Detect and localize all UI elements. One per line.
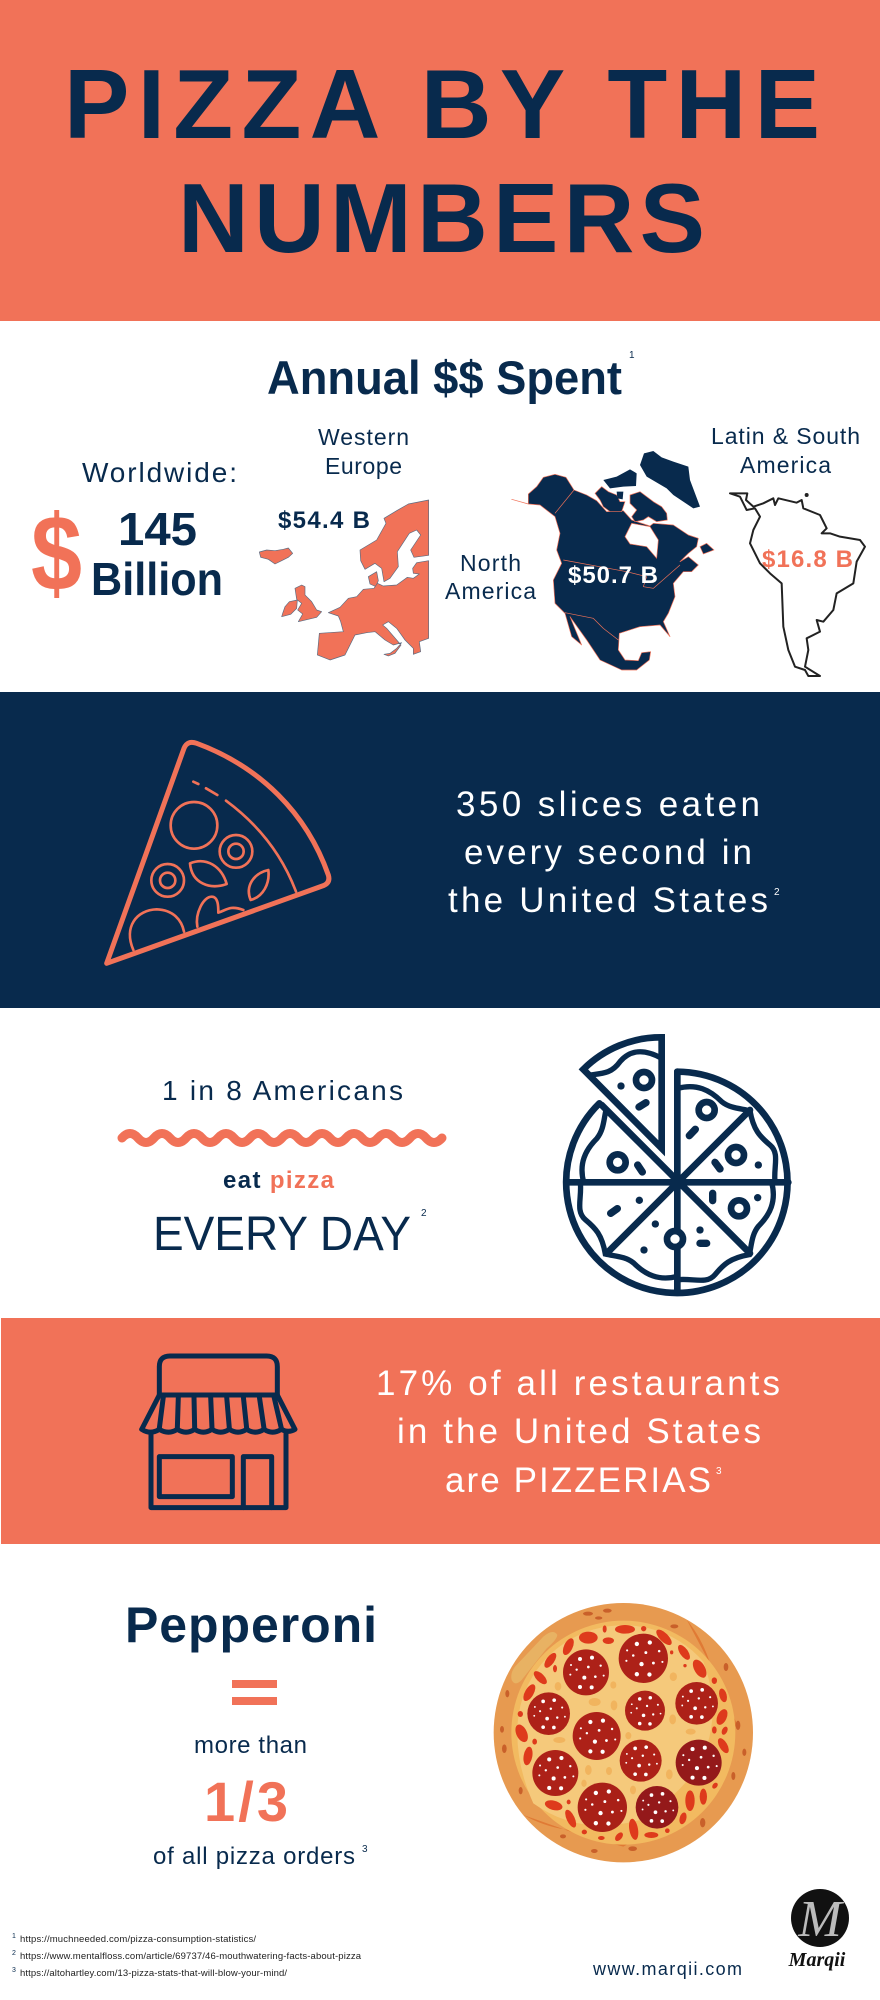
icon: dollar sign: $ — [31, 492, 82, 613]
logo: marqii: Marqii — [788, 1949, 846, 1971]
text: every day: EVERY DAY — [153, 1208, 411, 1261]
title: NUMBERS — [178, 163, 705, 273]
icon: sliced pizza — [566, 1037, 788, 1293]
region label: north america: North — [460, 550, 521, 576]
logo: marqii: M — [797, 1891, 844, 1948]
footnotes: 2 — [12, 1950, 16, 1957]
heading: annual spent: 1 — [629, 350, 635, 361]
logo: marqii — [788, 1889, 849, 1971]
icon: pizza slice — [107, 742, 329, 963]
footnotes: https://www.mentalfloss.com/article/69737/46-mouthwatering-facts-about-pizza — [20, 1951, 362, 1962]
region label: north america — [445, 550, 536, 604]
heading: annual spent: Annual $$ Spent — [267, 351, 622, 404]
text: pizzerias fact — [376, 1364, 780, 1500]
map: north america — [512, 451, 714, 670]
region label: western europe: Western — [318, 424, 409, 450]
text: pizzerias fact: are PIZZERIAS — [445, 1461, 711, 1500]
text: pizzerias fact: in the United States — [397, 1412, 761, 1451]
text: slices fact — [448, 785, 780, 920]
worldwide amount — [91, 503, 223, 605]
panel: footer — [12, 1889, 849, 1979]
text: pizzerias fact: 17% of all restaurants — [376, 1364, 780, 1403]
footnotes: https://altohartley.com/13-pizza-stats-that-will-blow-your-mind/ — [20, 1968, 287, 1979]
worldwide amount: Billion — [91, 553, 223, 605]
text: every day: 2 — [421, 1208, 427, 1219]
map: south america — [730, 493, 865, 676]
panel: title banner — [0, 0, 880, 321]
panel: one in eight — [122, 1037, 788, 1293]
footnotes — [12, 1933, 362, 1979]
text: one third: 1/3 — [204, 1770, 288, 1833]
map: western europe — [259, 500, 429, 660]
value: latin and south america: $16.8 B — [762, 546, 853, 573]
title: PIZZA BY THE — [64, 49, 820, 159]
region label: north america: America — [445, 578, 536, 604]
text: pepperoni: Pepperoni — [125, 1597, 377, 1653]
region label: western europe: Europe — [325, 453, 402, 479]
panel: annual spend — [31, 350, 865, 676]
illustration: pepperoni pizza — [494, 1603, 753, 1862]
text: 1 in 8 americans: 1 in 8 Americans — [162, 1075, 403, 1106]
text: eat pizza: eat pizza — [223, 1167, 335, 1194]
footnotes: 3 — [12, 1967, 16, 1974]
region label: western europe — [318, 424, 409, 479]
footnotes: 1 — [12, 1933, 16, 1940]
text: pizzerias fact: 3 — [716, 1466, 722, 1477]
footnotes: https://muchneeded.com/pizza-consumption-statistics/ — [20, 1934, 256, 1945]
text: of all pizza orders: of all pizza orders — [153, 1843, 355, 1870]
panel: slices per second — [0, 692, 880, 1008]
value: north america: $50.7 B — [568, 562, 658, 589]
title — [64, 49, 820, 273]
text: slices fact: 2 — [774, 887, 780, 898]
icon: equals sign — [232, 1680, 277, 1705]
icon: storefront — [142, 1356, 295, 1508]
region label: latin and south america — [711, 423, 860, 478]
panel: pepperoni — [125, 1597, 753, 1870]
decorative wave — [122, 1134, 442, 1142]
region label: latin and south america: Latin & South — [711, 423, 860, 449]
text: slices fact: the United States — [448, 881, 768, 920]
worldwide amount: 145 — [118, 503, 197, 555]
text: of all pizza orders: 3 — [362, 1844, 368, 1855]
text: more than: more than — [194, 1732, 307, 1759]
website link: www.marqii.com — [592, 1959, 742, 1979]
worldwide label: Worldwide: — [82, 457, 237, 488]
value: western europe: $54.4 B — [278, 507, 370, 534]
panel: pizzerias — [1, 1318, 880, 1544]
text: slices fact: 350 slices eaten — [456, 785, 760, 824]
region label: latin and south america: America — [740, 452, 831, 478]
text: slices fact: every second in — [464, 833, 752, 872]
